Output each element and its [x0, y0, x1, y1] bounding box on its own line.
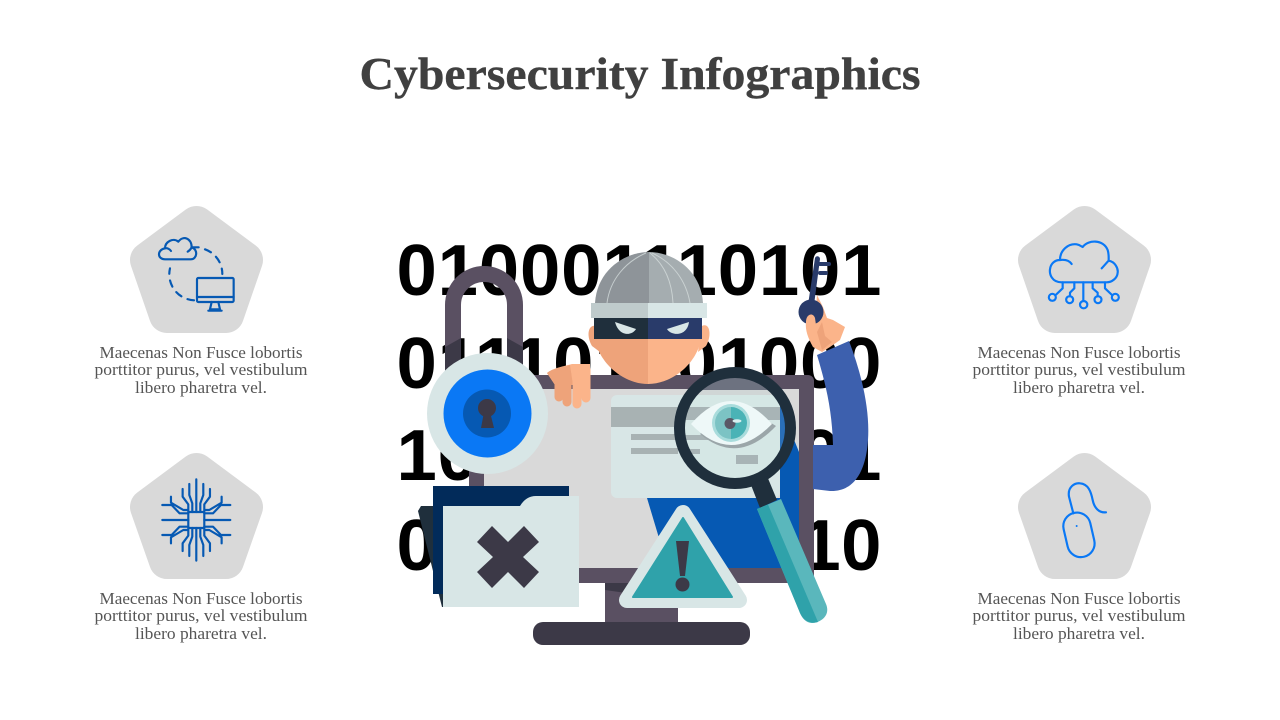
monitor stand: [533, 583, 750, 645]
panel: cloud network: [972, 224, 1186, 397]
title: Cybersecurity Infographics: [360, 48, 920, 99]
panel: cloud to desktop sync: [94, 224, 308, 397]
padlock body: [427, 353, 548, 474]
padlock shackle: [445, 274, 523, 420]
description text: porttitor purus, vel vestibulum: [972, 606, 1186, 625]
warning triangle: [627, 513, 739, 600]
ears: [589, 326, 600, 352]
panel: circuit chip: [94, 471, 308, 643]
magnifying glass: [680, 370, 827, 623]
description text: porttitor purus, vel vestibulum: [94, 606, 308, 625]
pentagon background: [148, 471, 245, 561]
monitor: [469, 375, 814, 583]
pentagon background: [148, 224, 245, 315]
description text: libero pharetra vel.: [1013, 378, 1145, 397]
binary code background: 010011010010: [396, 505, 882, 586]
icon: cloud and monitor: [159, 238, 234, 311]
description text: Maecenas Non Fusce lobortis: [100, 589, 302, 608]
lens ring: [680, 372, 790, 484]
description text: libero pharetra vel.: [135, 624, 267, 643]
description text: [94, 589, 308, 643]
icon: processor chip: [162, 479, 230, 561]
hacker head: [589, 252, 709, 384]
description text: libero pharetra vel.: [135, 378, 267, 397]
key: [798, 256, 829, 324]
binary code background: 101100110001: [396, 415, 882, 496]
eyes: [615, 322, 636, 334]
binary code background: 010001110101: [396, 230, 882, 311]
description text: libero pharetra vel.: [1013, 624, 1145, 643]
description text: Maecenas Non Fusce lobortis: [100, 343, 302, 362]
pentagon background: [1036, 224, 1133, 315]
panel: computer mouse: [972, 471, 1186, 643]
login card on screen: [611, 395, 780, 498]
description text: [972, 589, 1186, 643]
raised arm: [813, 341, 868, 491]
icon: cloud network: [1049, 242, 1119, 308]
face: [594, 318, 648, 384]
thumb: [806, 315, 832, 350]
beanie: [595, 252, 649, 303]
neck: [751, 476, 777, 508]
icon: mouse: [1061, 483, 1106, 560]
hand gripping monitor: [547, 364, 590, 404]
description text: [94, 343, 308, 397]
description text: Maecenas Non Fusce lobortis: [978, 343, 1180, 362]
binary code background: [396, 230, 882, 586]
binary code background: 011101001000: [396, 323, 882, 404]
description text: Maecenas Non Fusce lobortis: [978, 589, 1180, 608]
pentagon background: [1036, 471, 1133, 561]
lens contents: [685, 378, 785, 464]
description text: porttitor purus, vel vestibulum: [972, 360, 1186, 379]
mask: [594, 318, 648, 339]
handle: [757, 499, 827, 623]
folder with X: [418, 486, 579, 607]
hand base and index finger: [813, 295, 845, 352]
description text: porttitor purus, vel vestibulum: [94, 360, 308, 379]
description text: [972, 343, 1186, 397]
central illustration: hacker and computer: [396, 230, 882, 645]
